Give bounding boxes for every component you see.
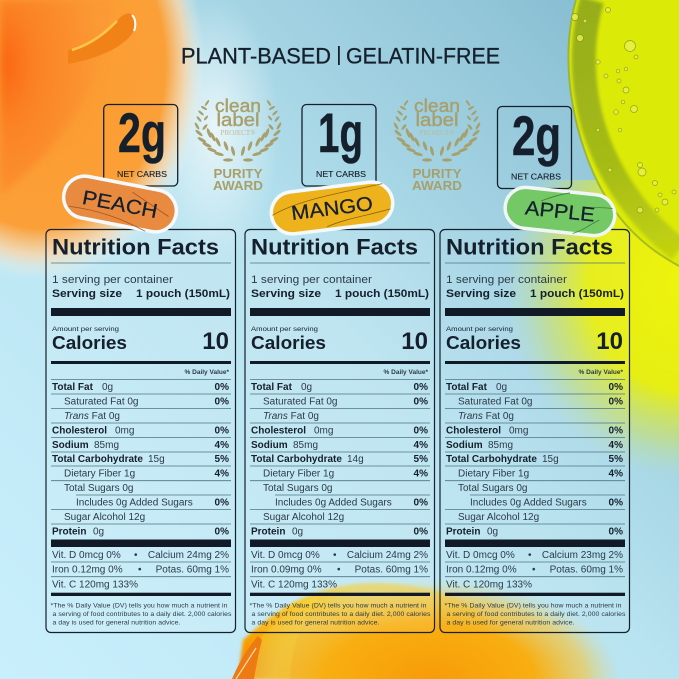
panel: peach nutrition facts: • <box>134 550 138 561</box>
title <box>181 44 500 68</box>
panel: peach nutrition facts: 4% <box>215 468 229 480</box>
panel: mango nutrition facts: 4% <box>414 440 428 451</box>
panel: apple nutrition facts: Cholesterol <box>446 426 501 436</box>
panel: apple nutrition facts: Dietary Fiber 1g <box>458 468 529 480</box>
panel: apple nutrition facts: 0g <box>487 526 498 538</box>
panel: mango nutrition facts: *The % Daily Value (DV) tells you how much a nutrient in <box>250 603 427 610</box>
apple fruit <box>568 0 679 266</box>
panel: apple nutrition facts: Protein <box>446 526 480 538</box>
panel: mango nutrition facts: 0mg <box>314 426 333 436</box>
panel: mango nutrition facts: 10 <box>401 328 428 355</box>
purity award: right: label <box>416 110 458 130</box>
panel: peach nutrition facts <box>46 230 236 632</box>
label: apple <box>503 185 617 238</box>
panel: peach nutrition facts: 15g <box>148 454 165 465</box>
panel: mango nutrition facts: Potas. 60mg 1% <box>355 565 428 576</box>
label: mango <box>269 180 395 236</box>
panel: mango nutrition facts: • <box>337 565 341 576</box>
net carbs badge: peach <box>104 101 178 186</box>
panel: mango nutrition facts: a serving of food contributes to a daily diet. 2,000 calories <box>252 611 430 618</box>
purity award: left: PROJECT® <box>221 129 256 137</box>
panel: apple nutrition facts: 0% <box>609 526 623 538</box>
panel: peach nutrition facts: % Daily Value* <box>185 369 229 376</box>
panel: apple nutrition facts: 5% <box>609 454 623 465</box>
net carbs badge: mango: NET CARBS <box>316 170 366 179</box>
panel: peach nutrition facts: Total Fat <box>52 382 94 393</box>
panel: peach nutrition facts: Protein <box>52 526 86 538</box>
panel: mango nutrition facts: 0% <box>414 396 428 408</box>
panel: apple nutrition facts: 10 <box>596 328 623 355</box>
panel: apple nutrition facts: % Daily Value* <box>579 369 623 376</box>
panel: peach nutrition facts: Calcium 24mg 2% <box>148 550 229 561</box>
panel: apple nutrition facts: • <box>528 550 532 561</box>
panel: apple nutrition facts: 0g <box>496 382 507 393</box>
panel: mango nutrition facts: 0% <box>414 426 428 436</box>
net carbs badge: apple: NET CARBS <box>511 172 561 182</box>
panel: mango nutrition facts: 85mg <box>293 440 318 451</box>
panel: apple nutrition facts: Vit. D 0mcg 0% <box>446 550 515 561</box>
purity award: left <box>194 96 282 193</box>
panel: peach nutrition facts: 10 <box>202 328 229 355</box>
panel: mango nutrition facts: 0g <box>292 526 303 538</box>
panel: mango nutrition facts: Saturated Fat 0g <box>263 396 338 408</box>
panel: mango nutrition facts: 0% <box>414 526 428 538</box>
panel: mango nutrition facts: Sodium <box>251 440 288 451</box>
purity award: left: label <box>216 110 260 130</box>
panel: mango nutrition facts: Trans Fat 0g <box>263 411 319 422</box>
panel: mango nutrition facts: 0g <box>301 382 312 393</box>
panel: peach nutrition facts: Potas. 60mg 1% <box>156 565 229 576</box>
net carbs badge: mango: 1g <box>318 101 363 164</box>
purity award: left: PURITY <box>214 167 263 181</box>
panel: peach nutrition facts: *The % Daily Value (DV) tells you how much a nutrient in <box>50 603 228 610</box>
panel: peach nutrition facts: 0% <box>215 498 229 508</box>
purity award: right: PURITY <box>412 167 462 181</box>
panel: peach nutrition facts: 1 pouch (150mL) <box>136 288 230 300</box>
purity award: left: clean <box>215 96 261 116</box>
panel: peach nutrition facts: 0% <box>215 382 229 393</box>
panel: apple nutrition facts: a serving of food contributes to a daily diet. 2,000 calories <box>446 611 625 618</box>
panel: peach nutrition facts: Saturated Fat 0g <box>64 396 138 408</box>
panel: peach nutrition facts: a day is used for general nutrition advice. <box>52 620 181 626</box>
panel: peach nutrition facts: Calories <box>52 332 127 353</box>
panel: apple nutrition facts: • <box>532 565 536 576</box>
panel: apple nutrition facts: Iron 0.12mg 0% <box>446 565 517 576</box>
panel: peach nutrition facts: Includes 0g Added Sugars <box>76 498 193 508</box>
panel: peach nutrition facts: Amount per serving <box>52 326 119 333</box>
panel: mango nutrition facts: Total Fat <box>251 382 293 393</box>
panel: mango nutrition facts <box>245 230 434 632</box>
panel: peach nutrition facts: 5% <box>215 454 229 465</box>
panel: apple nutrition facts: 1 serving per container <box>446 274 567 286</box>
net carbs badge: mango <box>302 101 376 186</box>
panel: mango nutrition facts: • <box>333 550 337 561</box>
panel: peach nutrition facts: • <box>138 565 142 576</box>
panel: apple nutrition facts: 4% <box>609 440 623 451</box>
panel: peach nutrition facts: 85mg <box>94 440 119 451</box>
panel: mango nutrition facts: Nutrition Facts <box>251 234 418 260</box>
label: apple: APPLE <box>524 197 596 227</box>
panel: apple nutrition facts: 0% <box>609 426 623 436</box>
mango fruit <box>232 579 619 679</box>
panel: peach nutrition facts: Sodium <box>52 440 89 451</box>
panel: apple nutrition facts: Potas. 60mg 1% <box>550 565 623 576</box>
panel: peach nutrition facts: 0mg <box>115 426 134 436</box>
panel: peach nutrition facts: 0g <box>102 382 113 393</box>
panel: peach nutrition facts: Vit. C 120mg 133% <box>52 580 138 590</box>
panel: apple nutrition facts: 0% <box>609 498 623 508</box>
purity award: left: AWARD <box>213 179 263 193</box>
panel: apple nutrition facts: 0% <box>609 396 623 408</box>
panel: apple nutrition facts: 1 pouch (150mL) <box>530 288 624 300</box>
panel: peach nutrition facts: Total Sugars 0g <box>64 483 134 494</box>
label: peach: PEACH <box>80 187 159 223</box>
panel: apple nutrition facts: Saturated Fat 0g <box>458 396 532 408</box>
panel: peach nutrition facts: Total Carbohydrate <box>52 454 143 465</box>
purity award: right <box>393 96 481 193</box>
panel: apple nutrition facts: Total Sugars 0g <box>458 483 528 494</box>
panel: apple nutrition facts: a day is used for general nutrition advice. <box>446 620 575 626</box>
panel: peach nutrition facts: 1 serving per container <box>52 274 173 286</box>
panel: apple nutrition facts: Total Carbohydrate <box>446 454 537 465</box>
panel: apple nutrition facts: Nutrition Facts <box>446 234 613 260</box>
panel: apple nutrition facts: Calories <box>446 332 521 353</box>
panel: mango nutrition facts: % Daily Value* <box>384 369 428 376</box>
panel: mango nutrition facts: Cholesterol <box>251 426 306 436</box>
panel: mango nutrition facts: 14g <box>347 454 364 465</box>
panel: mango nutrition facts: 1 pouch (150mL) <box>335 288 429 300</box>
panel: mango nutrition facts: Serving size <box>251 288 321 300</box>
panel: apple nutrition facts: Sugar Alcohol 12g <box>458 512 539 523</box>
label: peach <box>60 173 180 236</box>
purity award: right: clean <box>414 96 460 116</box>
net carbs badge: peach: 2g <box>118 101 166 164</box>
panel: mango nutrition facts: Includes 0g Added Sugars <box>275 498 392 508</box>
panel: peach nutrition facts: Dietary Fiber 1g <box>64 468 135 480</box>
purity award: right: AWARD <box>412 179 462 193</box>
panel: peach nutrition facts: 0% <box>215 396 229 408</box>
panel: mango nutrition facts: Sugar Alcohol 12g <box>263 512 344 523</box>
panel: peach nutrition facts: Sugar Alcohol 12g <box>64 512 145 523</box>
label: mango: MANGO <box>290 193 374 225</box>
panel: mango nutrition facts: 4% <box>414 468 428 480</box>
panel: apple nutrition facts: 0mg <box>509 426 528 436</box>
panel: apple nutrition facts: *The % Daily Value (DV) tells you how much a nutrient in <box>444 603 622 610</box>
panel: mango nutrition facts: Protein <box>251 526 285 538</box>
panel: apple nutrition facts: Total Fat <box>446 382 488 393</box>
title: PLANT-BASED <box>181 44 331 68</box>
net carbs badge: apple: 2g <box>512 104 561 167</box>
panel: peach nutrition facts: Iron 0.12mg 0% <box>52 565 123 576</box>
panel: apple nutrition facts: Includes 0g Added Sugars <box>470 498 587 508</box>
panel: mango nutrition facts: Amount per serving <box>251 326 318 333</box>
panel: peach nutrition facts: Cholesterol <box>52 426 107 436</box>
panel: peach nutrition facts: 0g <box>93 526 104 538</box>
panel: mango nutrition facts: a day is used for general nutrition advice. <box>252 620 380 626</box>
panel: mango nutrition facts: Calories <box>251 332 326 353</box>
panel: apple nutrition facts: Serving size <box>446 288 516 300</box>
panel: apple nutrition facts: Sodium <box>446 440 483 451</box>
panel: apple nutrition facts: Amount per serving <box>446 326 513 333</box>
panel: mango nutrition facts: Iron 0.09mg 0% <box>251 565 322 576</box>
panel: peach nutrition facts: a serving of food contributes to a daily diet. 2,000 calories <box>52 611 231 618</box>
net carbs badge: peach: NET CARBS <box>117 170 167 179</box>
panel: apple nutrition facts <box>440 230 630 632</box>
panel: peach nutrition facts: 4% <box>215 440 229 451</box>
panel: peach nutrition facts: Trans Fat 0g <box>64 411 120 422</box>
panel: mango nutrition facts: 0% <box>414 382 428 393</box>
panel: apple nutrition facts: 85mg <box>488 440 513 451</box>
panel: mango nutrition facts: 5% <box>414 454 428 465</box>
panel: mango nutrition facts: 0% <box>414 498 428 508</box>
peach fruit <box>0 0 136 195</box>
panel: mango nutrition facts: 1 serving per container <box>251 274 372 286</box>
panel: peach nutrition facts: 0% <box>215 426 229 436</box>
net carbs badge: apple <box>498 104 572 188</box>
purity award: right: PROJECT® <box>420 129 455 137</box>
panel: mango nutrition facts: Total Carbohydrate <box>251 454 342 465</box>
panel: mango nutrition facts: Vit. C 120mg 133% <box>251 580 337 590</box>
panel: apple nutrition facts: Calcium 23mg 2% <box>542 550 623 561</box>
panel: mango nutrition facts: Vit. D 0mcg 0% <box>251 550 320 561</box>
title: GELATIN-FREE <box>346 44 500 68</box>
panel: apple nutrition facts: 0% <box>609 382 623 393</box>
panel: mango nutrition facts: Total Sugars 0g <box>263 483 332 494</box>
panel: apple nutrition facts: Vit. C 120mg 133% <box>446 580 532 590</box>
panel: mango nutrition facts: Calcium 24mg 2% <box>347 550 428 561</box>
panel: apple nutrition facts: 15g <box>542 454 559 465</box>
panel: peach nutrition facts: 0% <box>215 526 229 538</box>
panel: apple nutrition facts: 4% <box>609 468 623 480</box>
panel: apple nutrition facts: Trans Fat 0g <box>458 411 514 422</box>
panel: peach nutrition facts: Serving size <box>52 288 122 300</box>
panel: peach nutrition facts: Nutrition Facts <box>52 234 219 260</box>
panel: mango nutrition facts: Dietary Fiber 1g <box>263 468 334 480</box>
panel: peach nutrition facts: Vit. D 0mcg 0% <box>52 550 121 561</box>
